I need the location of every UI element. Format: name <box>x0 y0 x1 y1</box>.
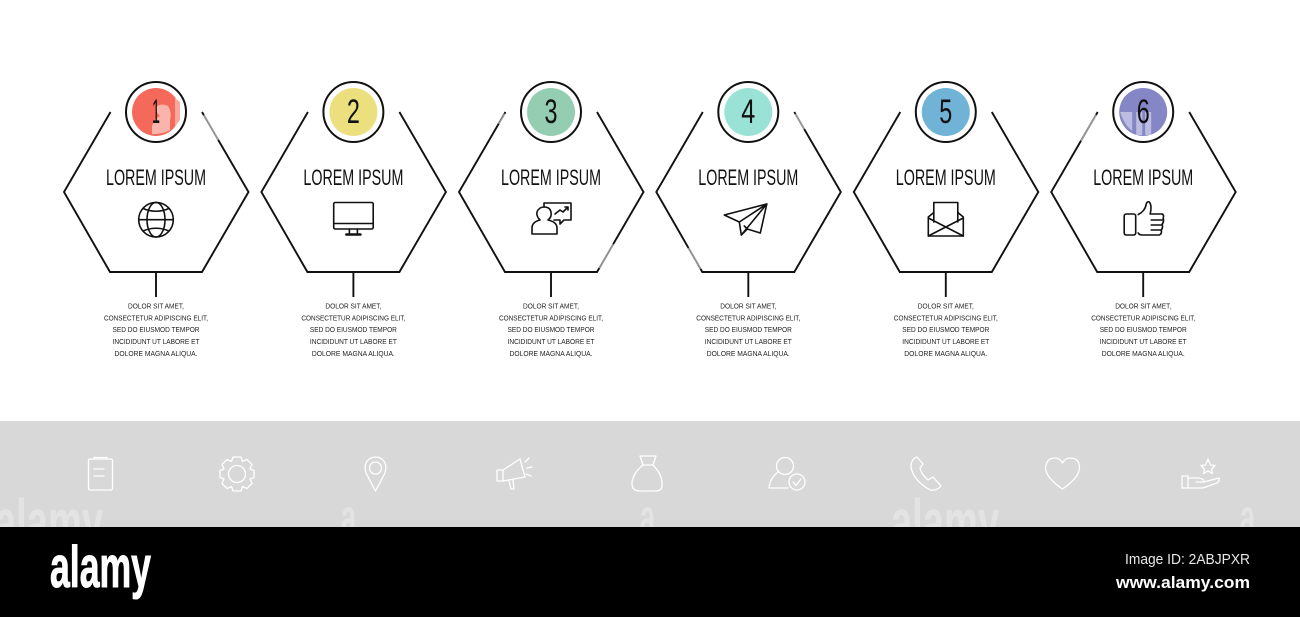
icon: heart <box>1045 458 1080 489</box>
description text: CONSECTETUR ADIPISCING ELIT, <box>301 313 405 322</box>
description text: INCIDIDUNT UT LABORE ET <box>902 337 990 346</box>
description text: DOLOR SIT AMET, <box>918 302 974 311</box>
description text: DOLOR SIT AMET, <box>128 302 184 311</box>
description text: SED DO EIUSMOD TEMPOR <box>902 325 990 334</box>
icon: open envelope <box>928 202 963 236</box>
panel: black footer <box>0 527 1300 617</box>
icon: globe <box>139 202 173 237</box>
watermark: small marks: a <box>640 489 656 547</box>
description text: CONSECTETUR ADIPISCING ELIT, <box>1091 313 1195 322</box>
description text: SED DO EIUSMOD TEMPOR <box>508 325 595 334</box>
hexagon outline <box>261 112 446 272</box>
description text: DOLOR SIT AMET, <box>1115 302 1171 311</box>
description text: SED DO EIUSMOD TEMPOR <box>1100 325 1187 334</box>
panel: step 2 <box>261 82 446 358</box>
icon: hand with star <box>1182 459 1219 488</box>
icon: gear <box>220 457 254 491</box>
website: www.alamy.com <box>1115 573 1250 592</box>
description text: DOLORE MAGNA ALIQUA. <box>114 349 198 358</box>
watermark: small marks: a <box>341 489 357 547</box>
panel: step 1 <box>64 82 248 358</box>
number badge 1: 1 <box>152 93 160 131</box>
heading: LOREM IPSUM <box>698 165 798 190</box>
watermark: left: alamy <box>0 486 103 558</box>
description text: INCIDIDUNT UT LABORE ET <box>705 337 792 346</box>
description text <box>301 302 405 358</box>
connector <box>155 272 157 297</box>
hexagon outline <box>854 112 1038 272</box>
description text: DOLORE MAGNA ALIQUA. <box>707 349 790 358</box>
number badge 5 <box>916 82 976 142</box>
connector <box>747 272 749 297</box>
description text <box>104 302 208 358</box>
description text: DOLORE MAGNA ALIQUA. <box>1102 349 1185 358</box>
watermark: centre right: alamy <box>891 486 999 558</box>
description text: DOLOR SIT AMET, <box>523 302 579 311</box>
description text: INCIDIDUNT UT LABORE ET <box>1100 337 1187 346</box>
description text: CONSECTETUR ADIPISCING ELIT, <box>894 313 998 322</box>
description text: SED DO EIUSMOD TEMPOR <box>310 325 397 334</box>
hexagon outline <box>64 112 248 272</box>
description text: CONSECTETUR ADIPISCING ELIT, <box>696 313 800 322</box>
panel: step 3 <box>459 82 644 358</box>
description text <box>696 302 800 358</box>
panel: step 4 <box>656 82 841 358</box>
icon: clipboard <box>88 458 112 490</box>
number badge 2: 2 <box>347 93 360 131</box>
description text: DOLORE MAGNA ALIQUA. <box>904 349 987 358</box>
logo: alamy: alamy <box>50 535 151 600</box>
icon: thumbs up <box>1124 202 1164 235</box>
hexagon outline <box>459 112 644 272</box>
hexagon outline <box>1051 112 1236 272</box>
heading: LOREM IPSUM <box>106 165 206 190</box>
description text: SED DO EIUSMOD TEMPOR <box>112 325 200 334</box>
heading: LOREM IPSUM <box>501 165 601 190</box>
heading: LOREM IPSUM <box>303 165 403 190</box>
image id: Image ID: 2ABJPXR <box>1125 551 1250 568</box>
number badge 3 <box>521 82 581 142</box>
connector <box>550 272 552 297</box>
description text <box>894 302 998 358</box>
panel: step 5 <box>854 82 1038 358</box>
hexagon outline <box>656 112 841 272</box>
description text: DOLOR SIT AMET, <box>325 302 381 311</box>
icon: presenter with chart <box>532 203 571 234</box>
number badge 6 <box>1113 82 1173 142</box>
number badge 2 <box>323 82 383 142</box>
icon: money bag <box>632 456 662 491</box>
description text: DOLOR SIT AMET, <box>720 302 776 311</box>
watermark: small marks: a <box>1240 489 1256 547</box>
panel: step 6 <box>1051 82 1236 358</box>
description text: INCIDIDUNT UT LABORE ET <box>310 337 397 346</box>
heading: LOREM IPSUM <box>1093 165 1193 190</box>
description text: CONSECTETUR ADIPISCING ELIT, <box>104 313 208 322</box>
icon: monitor <box>334 202 373 234</box>
number badge 5: 5 <box>939 93 952 131</box>
heading: LOREM IPSUM <box>896 165 996 190</box>
icon: person with check <box>769 458 805 490</box>
description text: DOLORE MAGNA ALIQUA. <box>510 349 592 358</box>
number badge 6: 6 <box>1137 93 1150 131</box>
description text: INCIDIDUNT UT LABORE ET <box>508 337 595 346</box>
icon: megaphone <box>497 458 532 489</box>
description text <box>1091 302 1195 358</box>
number badge 4 <box>718 82 778 142</box>
description text <box>499 302 603 358</box>
description text: DOLORE MAGNA ALIQUA. <box>312 349 395 358</box>
number badge 4: 4 <box>741 93 755 131</box>
number badge 1 <box>126 82 186 142</box>
description text: INCIDIDUNT UT LABORE ET <box>112 337 200 346</box>
icon: paper plane <box>724 204 767 235</box>
watermark: small marks <box>341 489 1256 547</box>
icon: telephone <box>911 457 941 490</box>
connector <box>945 272 947 297</box>
panel: grey icon strip <box>0 421 1300 558</box>
description text: CONSECTETUR ADIPISCING ELIT, <box>499 313 603 322</box>
connector <box>1142 272 1144 297</box>
connector <box>352 272 354 297</box>
icon: map pin <box>365 457 386 491</box>
description text: SED DO EIUSMOD TEMPOR <box>705 325 792 334</box>
number badge 3: 3 <box>544 93 558 131</box>
